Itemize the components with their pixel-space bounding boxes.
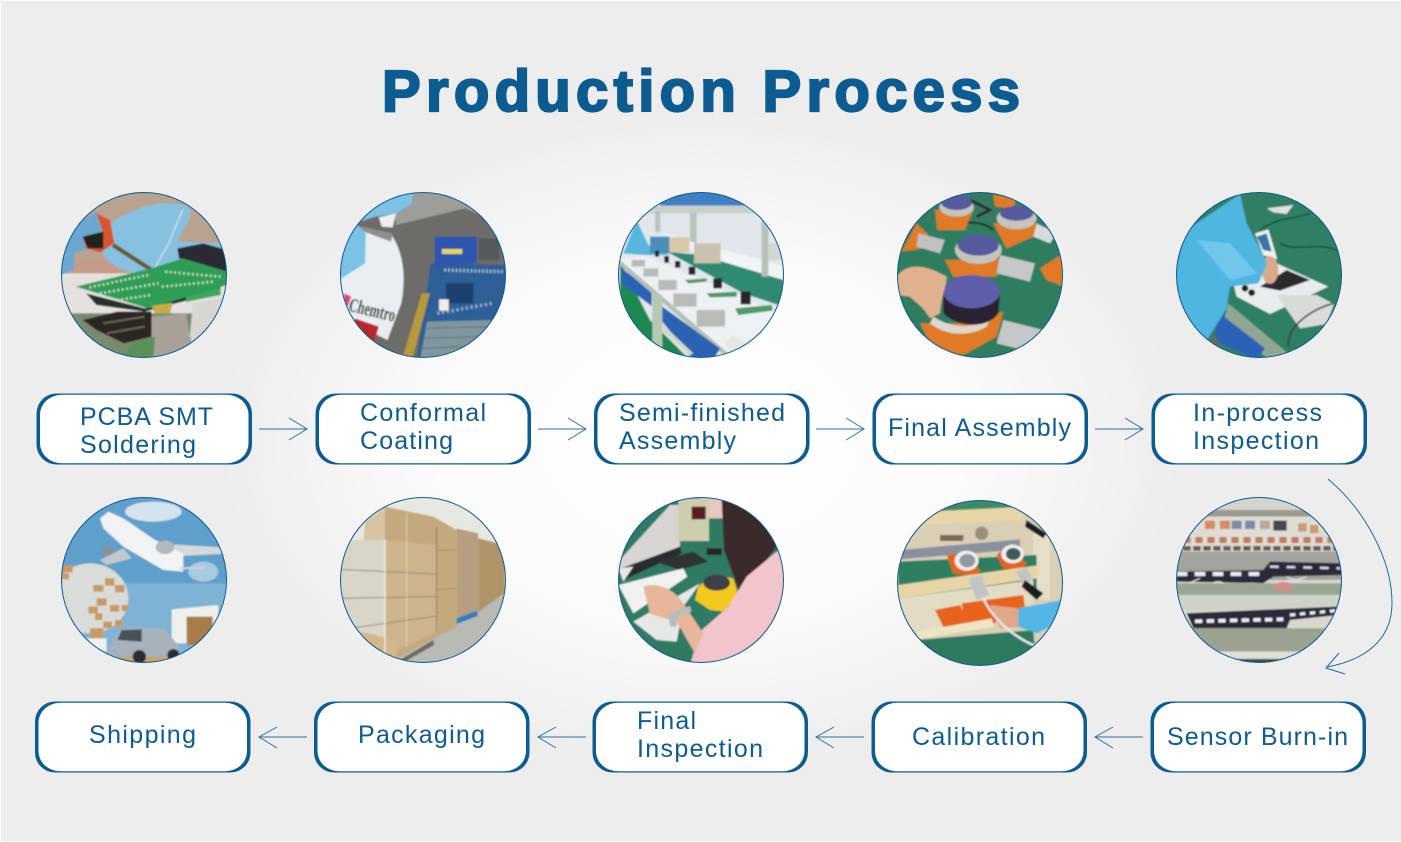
- label box: Shipping: Shipping: [89, 721, 196, 749]
- step 7: Calibration: [872, 498, 1087, 772]
- label box: Semi-finished Assembly: Assembly: [619, 427, 736, 455]
- label box: In-process Inspection: [1152, 394, 1367, 464]
- label box: Calibration: Calibration: [912, 723, 1045, 751]
- photo: spraying coating on a board: [341, 193, 505, 357]
- step 6: Sensor Burn-in: [1150, 495, 1366, 772]
- arrow: step 7 to step 8: [816, 727, 864, 748]
- label box: Final Inspection: [592, 702, 808, 772]
- label box: Sensor Burn-in: Sensor Burn-in: [1167, 723, 1348, 751]
- photo: worker inspecting a unit: [1173, 190, 1345, 360]
- photo: palletized cartons in a warehouse: [337, 495, 510, 667]
- arrow: step 4 to step 5: [1095, 418, 1143, 440]
- arrow: step 9 to step 10: [259, 727, 307, 748]
- label box: Conformal Coating: [316, 394, 531, 464]
- photo outline: [1176, 498, 1342, 662]
- photo: spraying coating on a board: Chemtro: [347, 294, 398, 326]
- label box: In-process Inspection: In-process: [1193, 399, 1322, 427]
- step 2: Conformal Coating: [316, 190, 531, 464]
- step 9: Packaging: [314, 495, 530, 772]
- label box: Shipping: [35, 702, 250, 772]
- photo outline: [62, 498, 226, 662]
- photo: plane, globe and delivery van: [62, 498, 226, 662]
- arrow: step 3 to step 4: [816, 418, 864, 440]
- photo outline: [1176, 192, 1342, 358]
- label box: Conformal Coating: Coating: [360, 427, 453, 455]
- photo outline: [340, 192, 506, 358]
- photo outline: [618, 498, 784, 662]
- label box: Conformal Coating: Conformal: [360, 399, 486, 427]
- label box: Semi-finished Assembly: Semi-finished: [619, 399, 785, 427]
- photo outline: [340, 498, 506, 662]
- label box: In-process Inspection: Inspection: [1193, 427, 1319, 455]
- photo: soldering a circuit board: [59, 190, 231, 363]
- arrow: step 1 to step 2: [259, 418, 307, 440]
- photo: gas detectors being assembled: [893, 190, 1067, 360]
- step 3: Semi-finished Assembly: [594, 190, 810, 464]
- label box: Semi-finished Assembly: [594, 394, 810, 464]
- arrow: curved connector from top row to bottom row: [1326, 479, 1392, 674]
- photo outline: [898, 192, 1062, 358]
- step 1: PCBA SMT Soldering: [36, 190, 252, 464]
- label box: Calibration: [872, 702, 1087, 772]
- photo: sensors on burn-in racks: [1173, 495, 1345, 666]
- photo: calibrating detectors with gas hose: [893, 498, 1067, 670]
- step 8: Final Inspection: [592, 495, 808, 772]
- photo outline: [898, 500, 1062, 666]
- label box: PCBA SMT Soldering: PCBA SMT: [80, 403, 213, 431]
- label box: Sensor Burn-in: [1150, 702, 1366, 772]
- label box: Final Inspection: Inspection: [637, 735, 763, 763]
- arrow: step 6 to step 7: [1095, 727, 1143, 748]
- label box: Packaging: [314, 702, 530, 772]
- step 5: In-process Inspection: [1152, 190, 1367, 464]
- label box: Final Inspection: Final: [637, 707, 696, 735]
- step 4: Final Assembly: [872, 190, 1088, 464]
- photo: inspector checking a yellow detector: [617, 495, 787, 665]
- step 10: Shipping: [35, 495, 250, 772]
- title: Production Process: [382, 59, 1020, 124]
- label box: PCBA SMT Soldering: Soldering: [80, 431, 196, 459]
- label box: Packaging: Packaging: [358, 721, 485, 749]
- arrow: step 2 to step 3: [538, 418, 586, 440]
- label box: Final Assembly: Final Assembly: [888, 414, 1072, 442]
- photo: semi-finished assembly line: [617, 190, 787, 360]
- label box: Final Assembly: [872, 394, 1088, 464]
- label box: PCBA SMT Soldering: [36, 394, 252, 464]
- photo outline: [618, 192, 784, 358]
- arrow: step 8 to step 9: [538, 727, 586, 748]
- photo outline: [62, 192, 226, 358]
